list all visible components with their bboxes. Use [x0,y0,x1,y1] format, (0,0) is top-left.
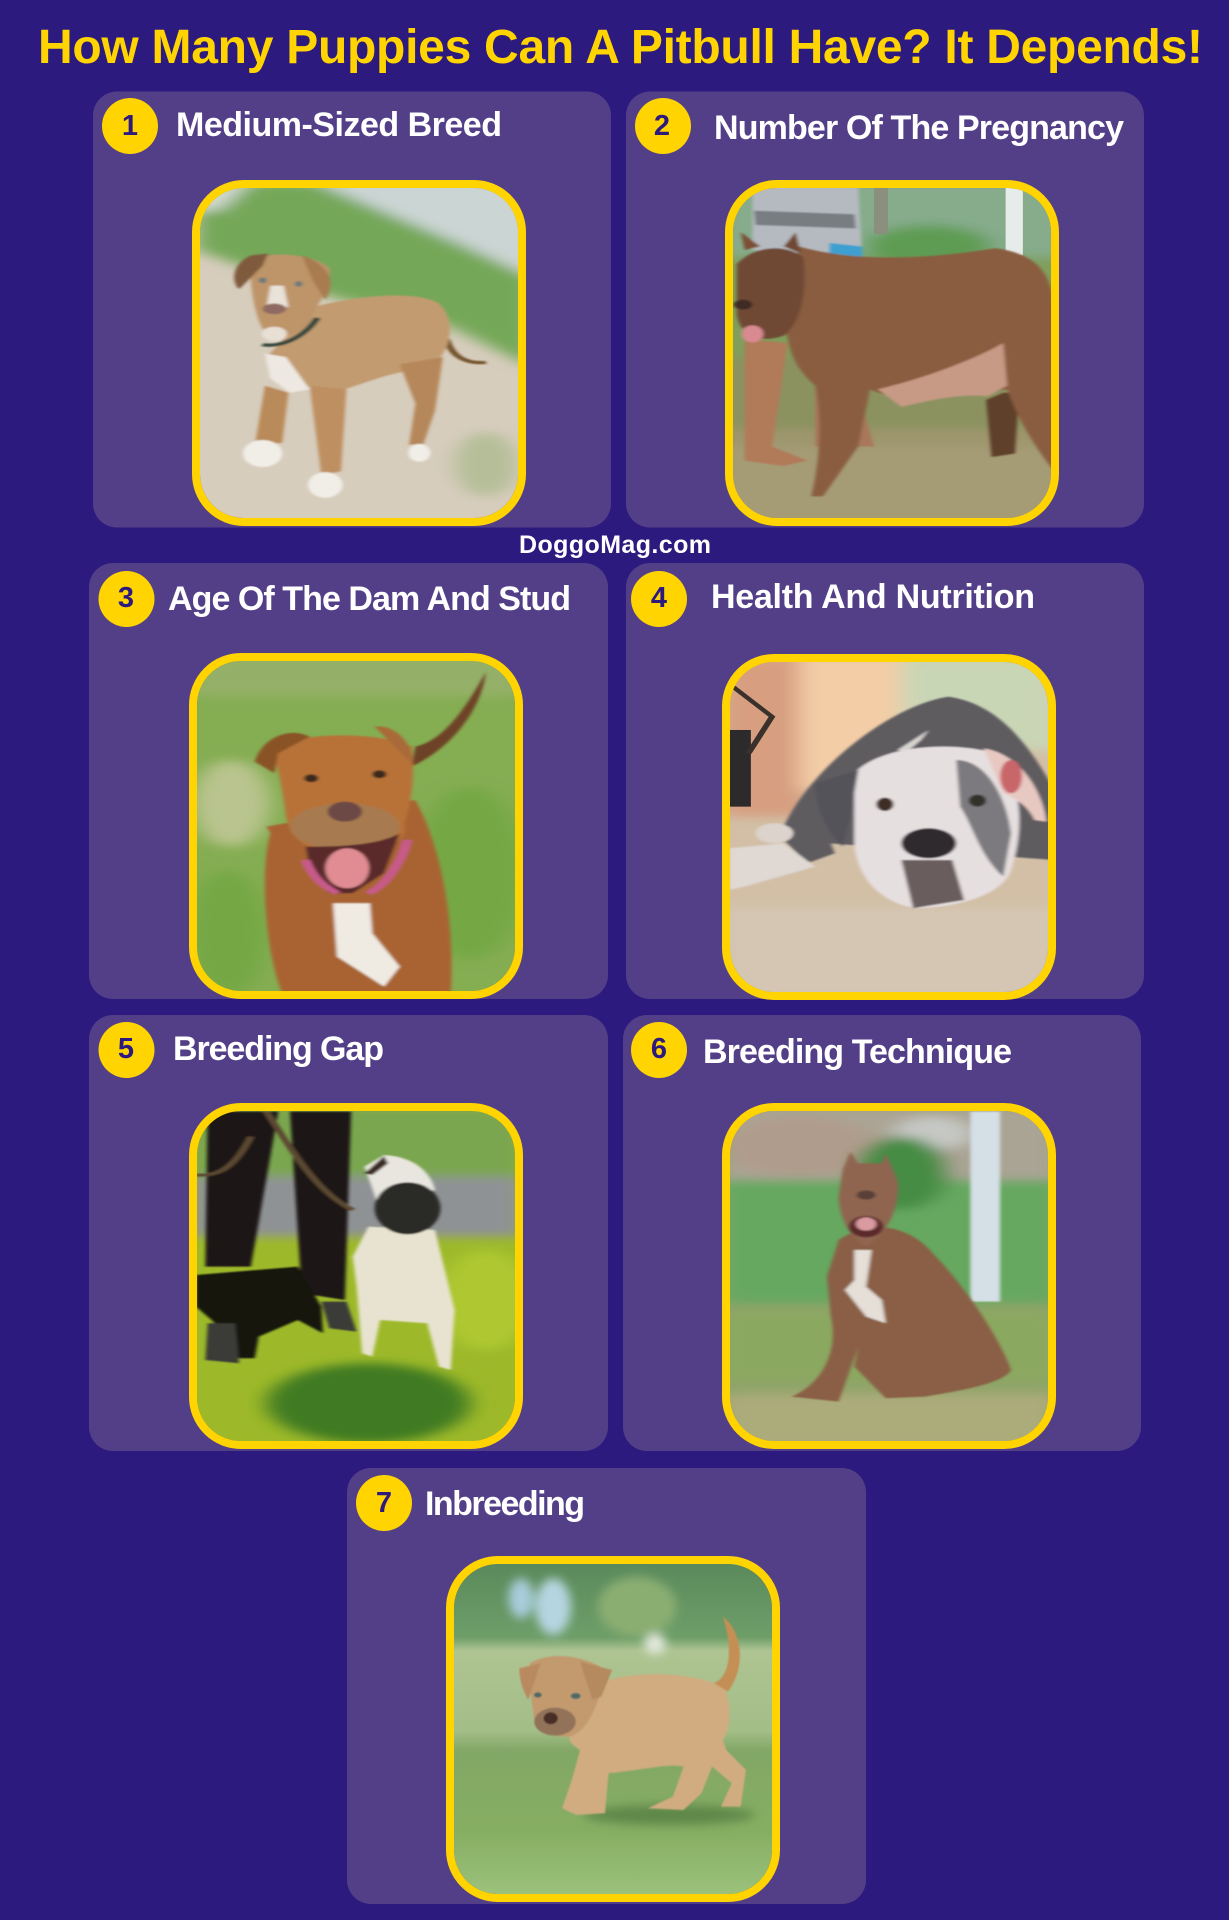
badge 2: 2 [654,110,670,142]
photo 6: brown pitbull sitting by fence [721,1107,1058,1450]
panel 3: age of the dam and stud [89,563,608,999]
badge 3 [98,571,154,627]
badge 6 [631,1022,687,1078]
panel 6: breeding technique [623,1015,1141,1451]
badge 5 [98,1022,154,1078]
photo 7 frame [450,1560,776,1898]
title: How Many Puppies Can A Pitbull Have? It Depends! [38,21,1203,74]
watermark: DoggoMag.com: DoggoMag.com [519,531,711,559]
badge 4 [631,571,687,627]
photo 6 frame [726,1107,1052,1445]
photo 2: pregnant brown pitbull [733,188,1051,518]
badge 3: 3 [118,582,134,614]
photo 1: tan puppy on path [200,188,518,518]
heading 2: Number Of The Pregnancy [714,109,1124,147]
badge 1: 1 [122,110,138,142]
photo 7: tan wrinkly puppy on lawn [448,1564,780,1897]
heading 1: Medium-Sized Breed [176,106,502,144]
panel 1 background [93,92,611,528]
badge 2 [635,98,691,154]
panel 2 background [626,92,1144,528]
badge 6: 6 [651,1033,667,1065]
panel 6 background [623,1015,1141,1451]
heading 7: Inbreeding [425,1485,585,1523]
panel 5: breeding gap [89,1015,608,1451]
photo 4: grey and white pitbull lying down [721,657,1058,997]
panel 7 background [347,1468,866,1904]
panel 1: medium-sized breed [93,92,611,528]
heading 6: Breeding Technique [703,1033,1012,1071]
panel 4 background [626,563,1144,999]
heading 3: Age Of The Dam And Stud [168,580,571,618]
panel 5 background [89,1015,608,1451]
photo 3: smiling red pitbull [188,657,525,997]
photo 3 frame [193,657,519,995]
photo 2 frame [729,184,1055,522]
heading 5: Breeding Gap [173,1030,384,1068]
photo 4 frame [726,658,1052,996]
badge 7: 7 [376,1487,392,1519]
panel 2: number of the pregnancy [626,92,1144,529]
heading 4: Health And Nutrition [711,578,1035,616]
panel 3 background [89,563,608,999]
badge 5: 5 [118,1033,134,1065]
panel 7: inbreeding [347,1468,866,1904]
photo 5: muzzled dog and small black dog [197,1111,515,1441]
badge 4: 4 [651,582,667,614]
panel 4: health and nutrition [626,563,1144,999]
badge 1 [102,98,158,154]
badge 7 [356,1475,412,1531]
photo 1 frame [196,184,522,522]
photo 5 frame [193,1107,519,1445]
